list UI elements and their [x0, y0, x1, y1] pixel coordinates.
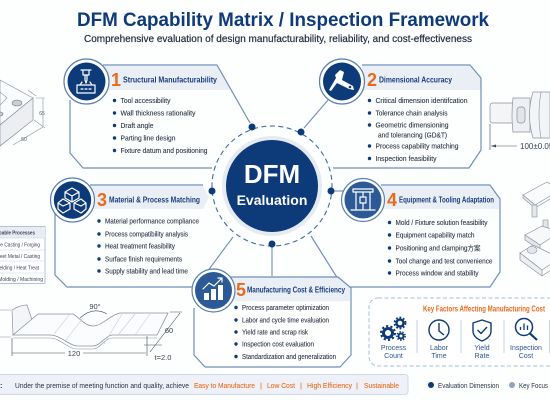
bullet list: Process window and stability [396, 270, 479, 278]
bottom goal bar: Sustainable [364, 381, 399, 390]
bullet list: Equipment capability match [396, 232, 475, 240]
drawing: isometric machined block: 50 [21, 137, 27, 143]
bullet list [234, 305, 336, 361]
icon: machine fixture [342, 178, 384, 222]
bullet list: Mold / Fixture solution feasibility [396, 220, 488, 227]
panel 4: equipment and tooling adaptation: Equipment & Tooling Adaptation [399, 196, 494, 204]
factor labels: Yield [474, 345, 490, 352]
icon: clock [429, 320, 449, 340]
factor labels [381, 345, 542, 360]
bullet list: Surface finish requirements [105, 256, 182, 264]
bullet list: Draft angle [120, 123, 154, 130]
panel 1: structural manufacturability [64, 59, 250, 168]
legend [428, 381, 548, 390]
factor labels: Count [384, 353, 403, 360]
drawing: bent sheet metal part: 120 [68, 349, 80, 358]
icon: magnifier [516, 318, 537, 340]
panel 3: material and process matching [50, 178, 209, 287]
bottom goal bar [0, 374, 408, 394]
panel 3: material and process matching: 3 [97, 190, 107, 210]
bullet list: Labor and cycle time evaluation [242, 318, 329, 324]
panel 4: equipment and tooling adaptation [311, 178, 500, 287]
panel 2: dimensional accuracy: 2 [367, 70, 377, 90]
drawing: bent sheet metal part [0, 302, 182, 362]
connector lines and central ring [207, 126, 345, 276]
icon: CNC tool [64, 59, 109, 104]
panel 3: material and process matching: Material & Process Matching [109, 196, 200, 204]
icon: caliper [320, 59, 364, 104]
table: applicable processes [0, 226, 45, 284]
icon: rising bar chart [192, 269, 235, 312]
icon: shield [473, 320, 491, 341]
bullet list: Tool accessibility [120, 98, 171, 105]
bullet list: Geometric dimensioning [376, 122, 449, 130]
factor labels: Labor [430, 345, 449, 352]
icon: gears [381, 318, 406, 340]
bullet list [97, 218, 199, 276]
bullet list: Tolerance chain analysis [376, 110, 448, 118]
bullet list: Critical dimension identifcation [376, 98, 468, 105]
panel 5: manufacturing cost and efficiency: 5 [236, 280, 246, 300]
bottom goal bar: | [356, 381, 358, 390]
factor labels: Inspection [510, 345, 542, 352]
bullet list [388, 220, 493, 278]
bottom goal bar: | [300, 381, 302, 390]
center: DFM evaluation: DFM [244, 159, 300, 189]
bullet list [113, 98, 208, 155]
bullet list: Process parameter optimization [242, 305, 329, 312]
bullet list: Wall thickness rationality [120, 110, 196, 118]
legend: Evaluation Dimension [438, 381, 499, 390]
panel 1: structural manufacturability: Structural Manufacturability [123, 76, 217, 84]
factor labels: Cost [519, 353, 533, 360]
bullet list: Process compatibility analysis [105, 232, 188, 238]
panel 1: structural manufacturability: 1 [111, 70, 121, 90]
drawing: isometric machined block: 65 [39, 111, 45, 117]
bottom goal bar: Under the premise of meeting function and quality, achieve [15, 381, 189, 390]
bottom goal bar: | [260, 381, 262, 390]
bullet list [368, 98, 468, 163]
title: DFM Capability Matrix / Inspection Framework [77, 9, 489, 31]
panel 5: manufacturing cost and efficiency: Manufacturing Cost & Efficiency [247, 286, 345, 294]
factor labels: Rate [475, 353, 489, 360]
bullet list: Material performance compliance [105, 218, 199, 226]
bullet list: Yield rate and scrap risk [242, 330, 308, 336]
bullet list: Process capability matching [376, 144, 459, 150]
bottom goal bar: High Efficiency [307, 381, 352, 390]
bullet list: Positioning and clamping方案 [396, 244, 481, 252]
panel: key factors affecting manufacturing cost [369, 298, 550, 366]
panel 2: dimensional accuracy: Dimensional Accuracy [379, 76, 452, 84]
center: DFM evaluation: Evaluation [237, 192, 307, 208]
drawing: stacked fixture plates [520, 182, 550, 276]
icon: stacked boxes [50, 178, 94, 222]
ring dots [208, 124, 334, 248]
bullet list: Fixture datum and positioning [120, 148, 208, 155]
drawing: bent sheet metal part: t=2.0 [155, 353, 171, 362]
bullet list: Supply stability and lead time [105, 268, 188, 276]
bullet list: Parting line design [120, 136, 176, 142]
bullet list: Heat treatment feasibility [105, 244, 175, 250]
drawing: turned shaft with dimension [490, 92, 550, 151]
panel 2: dimensional accuracy [304, 59, 481, 168]
bullet list: Standardization and generalization [242, 354, 336, 361]
panel 4: equipment and tooling adaptation: 4 [387, 190, 397, 210]
factor labels: Time [431, 353, 447, 360]
bottom goal bar: : [0, 381, 3, 390]
drawing: bent sheet metal part: 60 [165, 326, 173, 335]
center: DFM evaluation [222, 136, 322, 236]
bullet list: Inspection cost evaluation [242, 342, 314, 348]
bottom goal bar: Low Cost [267, 381, 296, 390]
drawing: isometric machined block [0, 80, 45, 146]
factor labels: Process [381, 345, 407, 352]
bullet list: Inspection feasibility [376, 156, 437, 163]
bottom goal bar: Easy to Manufacture [194, 381, 255, 390]
bullet list: and tolerancing (GD&T) [378, 132, 447, 140]
subtitle: Comprehensive evaluation of design manufacturability, reliability, and cost-effectiveness [84, 33, 472, 45]
bullet list: Tool change and test convenience [396, 258, 493, 266]
drawing: bent sheet metal part: 90° [89, 302, 101, 311]
panel 5: manufacturing cost and efficiency [192, 269, 351, 367]
